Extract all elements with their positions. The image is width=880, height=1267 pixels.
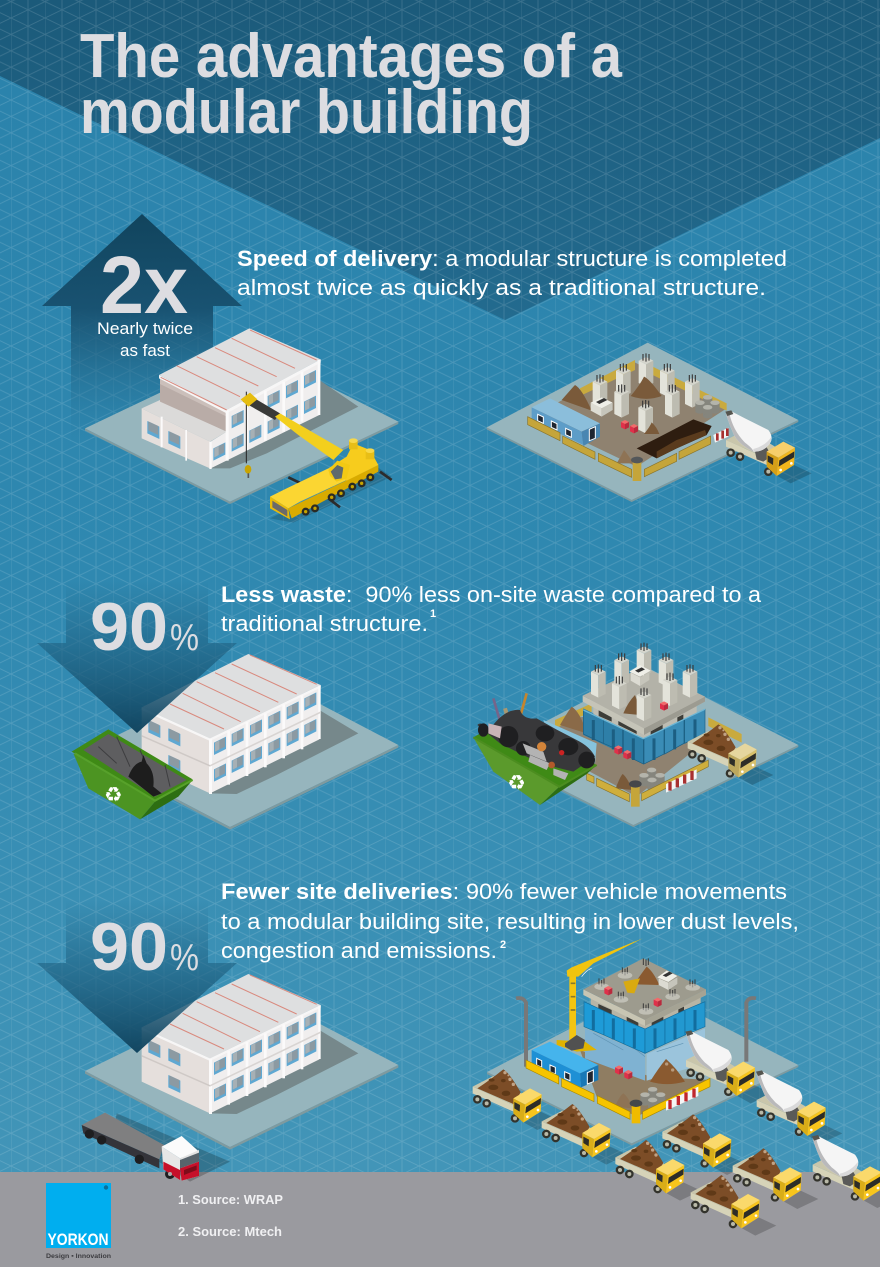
stat: 90%	[90, 589, 199, 665]
panel: less waste	[37, 580, 798, 830]
mixer one	[685, 1030, 772, 1103]
mixer two	[756, 1070, 842, 1143]
vehicles: loaded trucks and cement mixers	[473, 1030, 880, 1236]
stat caption	[97, 320, 193, 360]
waste text	[221, 582, 761, 636]
waste text: 1	[430, 608, 436, 620]
panel: speed of delivery	[42, 214, 812, 523]
skip: nearly empty	[72, 729, 193, 819]
deliveries text: to a modular building site, resulting in lower dust levels,	[221, 909, 799, 934]
stat caption: as fast	[120, 342, 170, 360]
truck one	[473, 1069, 558, 1130]
footnotes: 2. Source: Mtech	[178, 1224, 282, 1239]
flatbed lorry	[82, 1113, 230, 1182]
dark top banner	[0, 0, 880, 320]
skip: nearly empty: ♻	[104, 784, 123, 807]
deliveries text: 2	[500, 939, 506, 951]
logo: Yorkon	[46, 1183, 111, 1260]
arrow: up	[42, 214, 242, 450]
stat: 90%: 90	[90, 589, 168, 665]
stat: 90%	[90, 909, 199, 985]
arrow: down	[37, 580, 237, 733]
stat: 90%: 90	[90, 909, 168, 985]
footer band	[0, 1172, 880, 1267]
loaded dump truck	[688, 724, 773, 785]
stat: 2x: 2x	[100, 240, 188, 331]
speed text: Speed of delivery : a modular structure is completed	[237, 246, 787, 271]
truck four	[662, 1114, 748, 1175]
mixer three	[812, 1135, 880, 1208]
footnotes	[178, 1192, 283, 1239]
truck two	[542, 1104, 627, 1165]
mobile crane	[241, 392, 392, 523]
speed text: almost twice as quickly as a traditional structure.	[237, 275, 766, 300]
truck three	[615, 1140, 701, 1201]
logo: Yorkon: YORKON	[48, 1230, 108, 1249]
deliveries text	[221, 879, 799, 963]
traditional site	[487, 343, 798, 502]
title: The advantages of a	[80, 22, 622, 91]
construction site with crane	[487, 938, 798, 1145]
stat: 90%: %	[170, 617, 199, 659]
truck five	[733, 1148, 818, 1209]
panel: fewer site deliveries	[37, 879, 880, 1236]
deliveries text: congestion and emissions.	[221, 938, 497, 963]
cement mixer	[725, 410, 812, 483]
modular site slab	[85, 348, 398, 504]
waste text: traditional structure.	[221, 611, 428, 636]
stat: 90%: %	[170, 937, 199, 979]
logo: Yorkon: Design ▪ Innovation	[46, 1253, 111, 1260]
modular building	[85, 974, 398, 1150]
modular building	[85, 654, 398, 830]
truck six	[691, 1175, 776, 1236]
title	[80, 22, 622, 147]
title: modular building	[80, 78, 533, 147]
waste text: Less waste: 90% less on-site waste compared to a	[221, 582, 761, 607]
deliveries text: Fewer site deliveries : 90% fewer vehicle movements	[221, 879, 787, 904]
speed text	[237, 246, 787, 300]
modular building under construction	[142, 328, 321, 469]
traditional site with tower	[487, 643, 798, 827]
stat caption: Nearly twice	[97, 320, 193, 338]
skip: overflowing waste	[473, 693, 597, 805]
skip: overflowing waste: ♻	[507, 771, 526, 794]
footnotes: 1. Source: WRAP	[178, 1192, 283, 1207]
arrow: down	[37, 900, 237, 1053]
